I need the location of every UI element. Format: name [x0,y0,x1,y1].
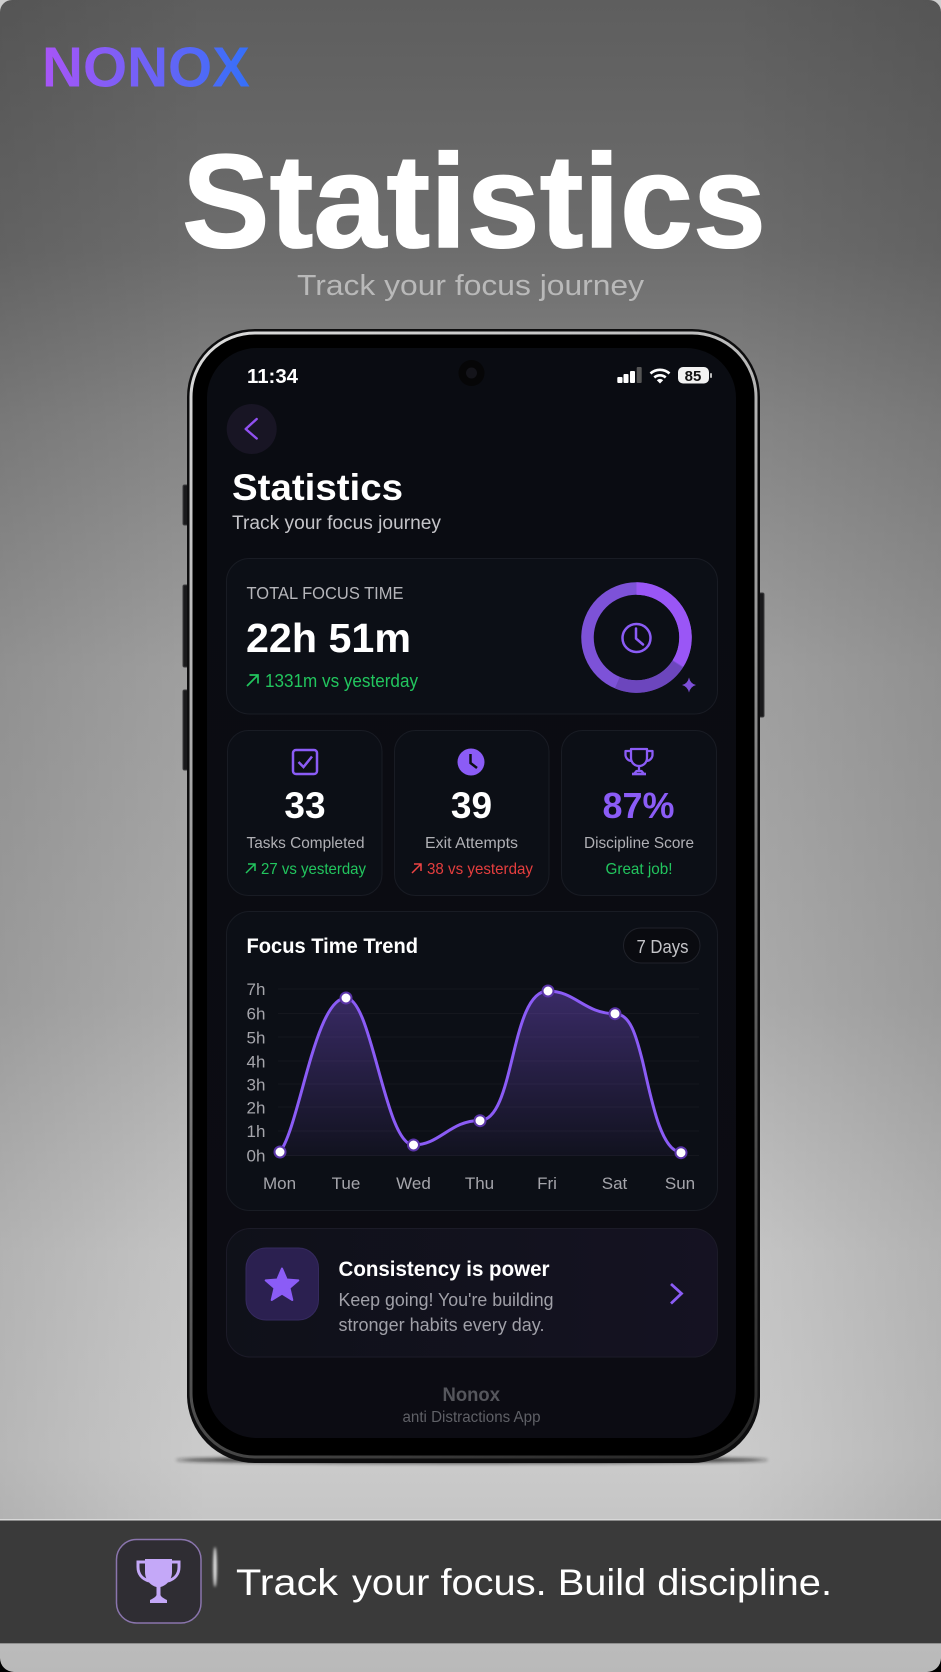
callout text [338,1289,554,1335]
y axis labels: 5h [246,1028,265,1048]
camera [458,360,484,386]
panel: exit attempts [394,730,549,896]
line chart [246,980,699,1193]
label: Discipline Score [584,835,694,852]
footer brand: Nonox [442,1385,500,1406]
screen subheading: Track your focus journey [232,513,441,534]
battery: 85 [685,368,701,385]
x axis labels: Fri [537,1174,557,1193]
delta text: 1331m vs yesterday [265,671,418,691]
status: Great job! [606,861,672,878]
label: Exit Attempts [425,835,518,852]
clock icon [622,624,650,652]
x axis labels: Tue [332,1174,360,1193]
phone body [187,329,760,1463]
corner: top right [929,0,941,12]
panel: total focus time [226,558,718,714]
label: Tasks Completed [246,835,364,852]
icon: trophy [625,749,653,774]
corner: bottom left [0,1658,14,1672]
icon: clock [458,748,484,776]
x axis labels: Sat [602,1174,628,1193]
logo: NONOX: NONOX [42,36,250,100]
callout title: Consistency is power [338,1257,550,1281]
x axis labels: Wed [396,1174,431,1193]
time: 11:34 [247,366,299,388]
panel: consistency callout [226,1228,718,1357]
value: 33 [284,785,326,826]
icon: checkbox [293,750,317,774]
y axis labels: 1h [246,1122,265,1141]
banner [0,1519,941,1644]
range pill: 7 Days [636,937,688,957]
trend line [280,991,681,1152]
y axis labels: 7h [246,980,265,999]
range pill [624,928,700,963]
panel: tasks completed [228,730,382,896]
side buttons [183,485,764,770]
icon: trophy tile [116,1540,201,1623]
back button [227,404,277,454]
area [280,991,681,1156]
data points [274,986,686,1158]
footer tagline: anti Distractions App [402,1409,540,1426]
y axis labels: 4h [246,1052,265,1072]
battery [678,367,712,385]
corner: top left [0,0,12,12]
delta arrow [412,864,421,873]
value: 39 [451,785,492,826]
phone [183,329,764,1463]
wifi [650,370,670,384]
callout text: stronger habits every day. [338,1314,544,1335]
corner: bottom right [927,1658,941,1672]
x axis labels: Mon [263,1174,296,1193]
y axis labels: 2h [246,1098,265,1118]
delta text: 27 vs yesterday [261,861,366,878]
value: 22h 51m [246,615,411,661]
icon: chevron [671,1284,682,1304]
panel: discipline score [562,730,716,896]
delta text: 38 vs yesterday [427,861,533,878]
subtitle: Track your focus journey [297,270,645,302]
x axis labels: Sun [665,1174,695,1193]
y axis labels: 3h [246,1076,265,1094]
banner text: Track [236,1562,339,1603]
phone shadow [176,1456,768,1464]
banner text: your focus. Build discipline. [352,1562,832,1603]
panel: focus time trend [226,912,718,1210]
y axis labels: 0h [246,1146,265,1166]
x axis labels: Thu [465,1174,494,1193]
delta arrow [246,864,255,873]
title: Statistics [182,128,766,276]
label: TOTAL FOCUS TIME [246,583,404,603]
callout text: Keep going! You're building [338,1289,554,1310]
icon: star tile [246,1248,318,1320]
sparkle icon [682,678,696,692]
delta arrow [247,675,258,686]
chart title: Focus Time Trend [246,934,418,958]
signal [617,367,642,383]
light streak [213,1547,217,1587]
screen heading: Statistics [232,467,403,508]
progress ring [569,570,704,705]
y axis labels: 6h [246,1004,265,1024]
x axis labels [263,1174,695,1193]
value: 87% [602,785,674,826]
screen [207,348,736,1438]
y axis labels [246,980,265,1166]
status bar [247,360,712,388]
